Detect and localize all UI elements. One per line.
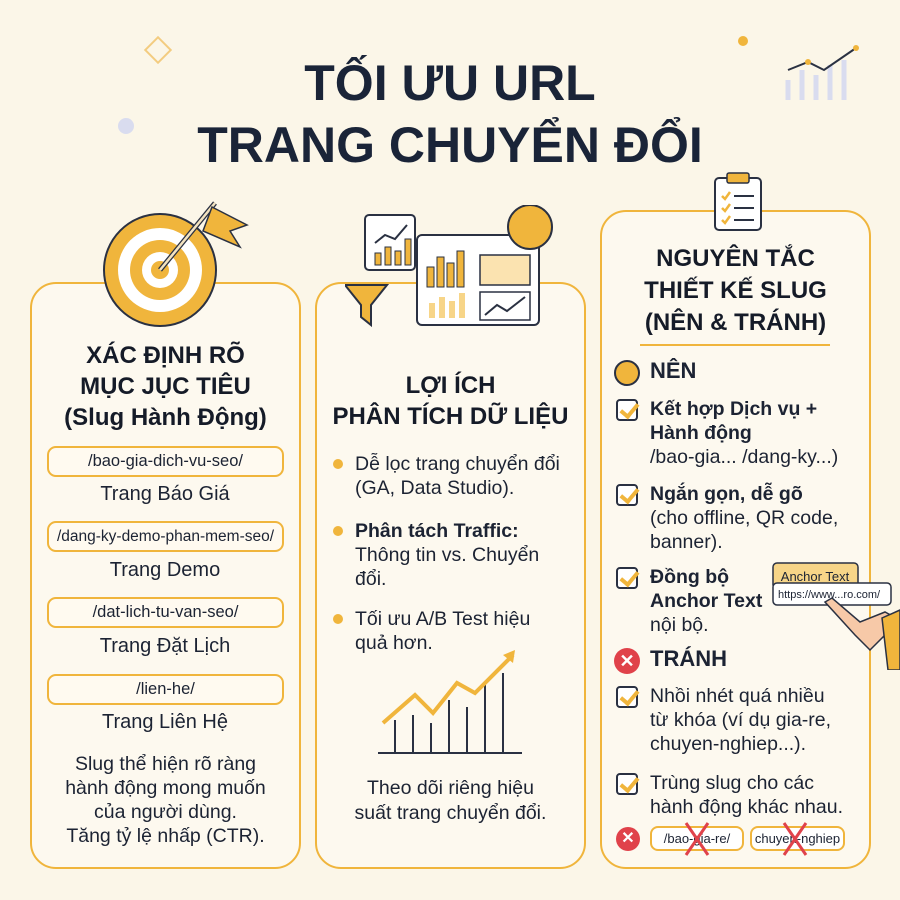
text: left summary: của người dùng. [94,801,237,823]
text: /dang-ky-demo-phan-mem-seo/ [57,528,274,545]
slug list [47,446,284,733]
list: NÊN items: Anchor Text [650,590,762,612]
chart: growth line [378,650,522,754]
panel: left [30,282,301,869]
heading: middle: LỢI ÍCH [406,372,495,399]
text: Phân tách Traffic: Thông tin vs. Chuyển đổi. [355,520,539,590]
text: left summary: Tăng tỷ lệ nhấp (CTR). [66,825,265,847]
heading: middle [333,372,568,430]
examples: crossed slugs [616,822,845,856]
text: Trang Đặt Lịch [100,635,230,657]
callout: anchor text illustration [772,562,900,670]
heading: right: THIẾT KẾ SLUG [644,277,827,304]
list: TRÁNH items: từ khóa (ví dụ gia-re, [650,709,831,731]
section: NÊN: NÊN [650,358,696,383]
title: TỐI ƯU URL [304,55,596,111]
title [197,55,703,173]
icon: analytics dashboard [345,205,553,327]
callout: anchor text illustration: Anchor Text [781,569,850,584]
text: Trang Demo [110,559,220,581]
heading: left: (Slug Hành Động) [64,404,267,431]
list: TRÁNH items: hành động khác nhau. [650,796,843,818]
text: left summary [65,753,266,847]
panel: middle [315,282,586,869]
text: /dat-lich-tu-van-seo/ [93,603,238,621]
text: Trang Báo Giá [100,483,230,505]
bullets: benefits [333,453,560,654]
list: NÊN items: (cho offline, QR code, [650,507,838,529]
icon: clipboard [714,172,762,231]
text: middle summary [355,777,546,824]
panel: right [600,210,871,869]
list: NÊN items: Đồng bộ [650,566,729,588]
callout: anchor text illustration: https://www...ro.com/ [778,589,881,601]
section: TRÁNH: ✕ [619,651,635,671]
text: /bao-gia-dich-vu-seo/ [88,452,243,470]
text: /lien-he/ [136,680,195,698]
section: TRÁNH [614,646,727,674]
icon: mini chart top right [786,45,859,100]
text: Tối ưu A/B Test hiệu quả hơn. [355,608,530,654]
text: left summary: hành động mong muốn [65,777,266,799]
section: NÊN [614,358,696,386]
list: NÊN items: Hành động [650,422,752,444]
examples: crossed slugs: ✕ [621,830,635,847]
text: left summary: Slug thể hiện rõ ràng [75,753,256,775]
list: NÊN items: banner). [650,531,723,553]
heading: middle: PHÂN TÍCH DỮ LIỆU [333,403,568,430]
section: TRÁNH: TRÁNH [650,646,727,671]
heading: right: NGUYÊN TẮC [656,245,815,272]
list: NÊN items: nội bộ. [650,614,709,636]
list: TRÁNH items: Nhồi nhét quá nhiều [650,685,825,707]
decorative shapes [144,36,172,64]
list: TRÁNH items: chuyen-nghiep...). [650,733,806,755]
list: NÊN items: Kết hợp Dịch vụ + [650,398,817,420]
heading: right [644,244,827,336]
examples: crossed slugs: chuyen-nghiep [755,831,840,846]
heading: left: MỤC JỤC TIÊU [80,373,251,400]
text: Trang Liên Hệ [102,711,228,733]
text: middle summary: suất trang chuyển đổi. [355,802,546,824]
heading: right: (NÊN & TRÁNH) [645,309,826,336]
list: TRÁNH items: Trùng slug cho các [650,772,814,794]
icon: target [103,201,249,327]
list: NÊN items: /bao-gia... /dang-ky...) [650,446,838,468]
heading: left: XÁC ĐỊNH RÕ [86,342,245,369]
title: TRANG CHUYỂN ĐỔI [197,117,703,173]
heading: left [64,342,267,431]
list: NÊN items: Ngắn gọn, dễ gõ [650,483,803,505]
text: middle summary: Theo dõi riêng hiệu [367,777,534,799]
text: Dễ lọc trang chuyển đổi (GA, Data Studio). [355,453,560,499]
examples: crossed slugs: /bao-gia-re/ [664,831,730,846]
